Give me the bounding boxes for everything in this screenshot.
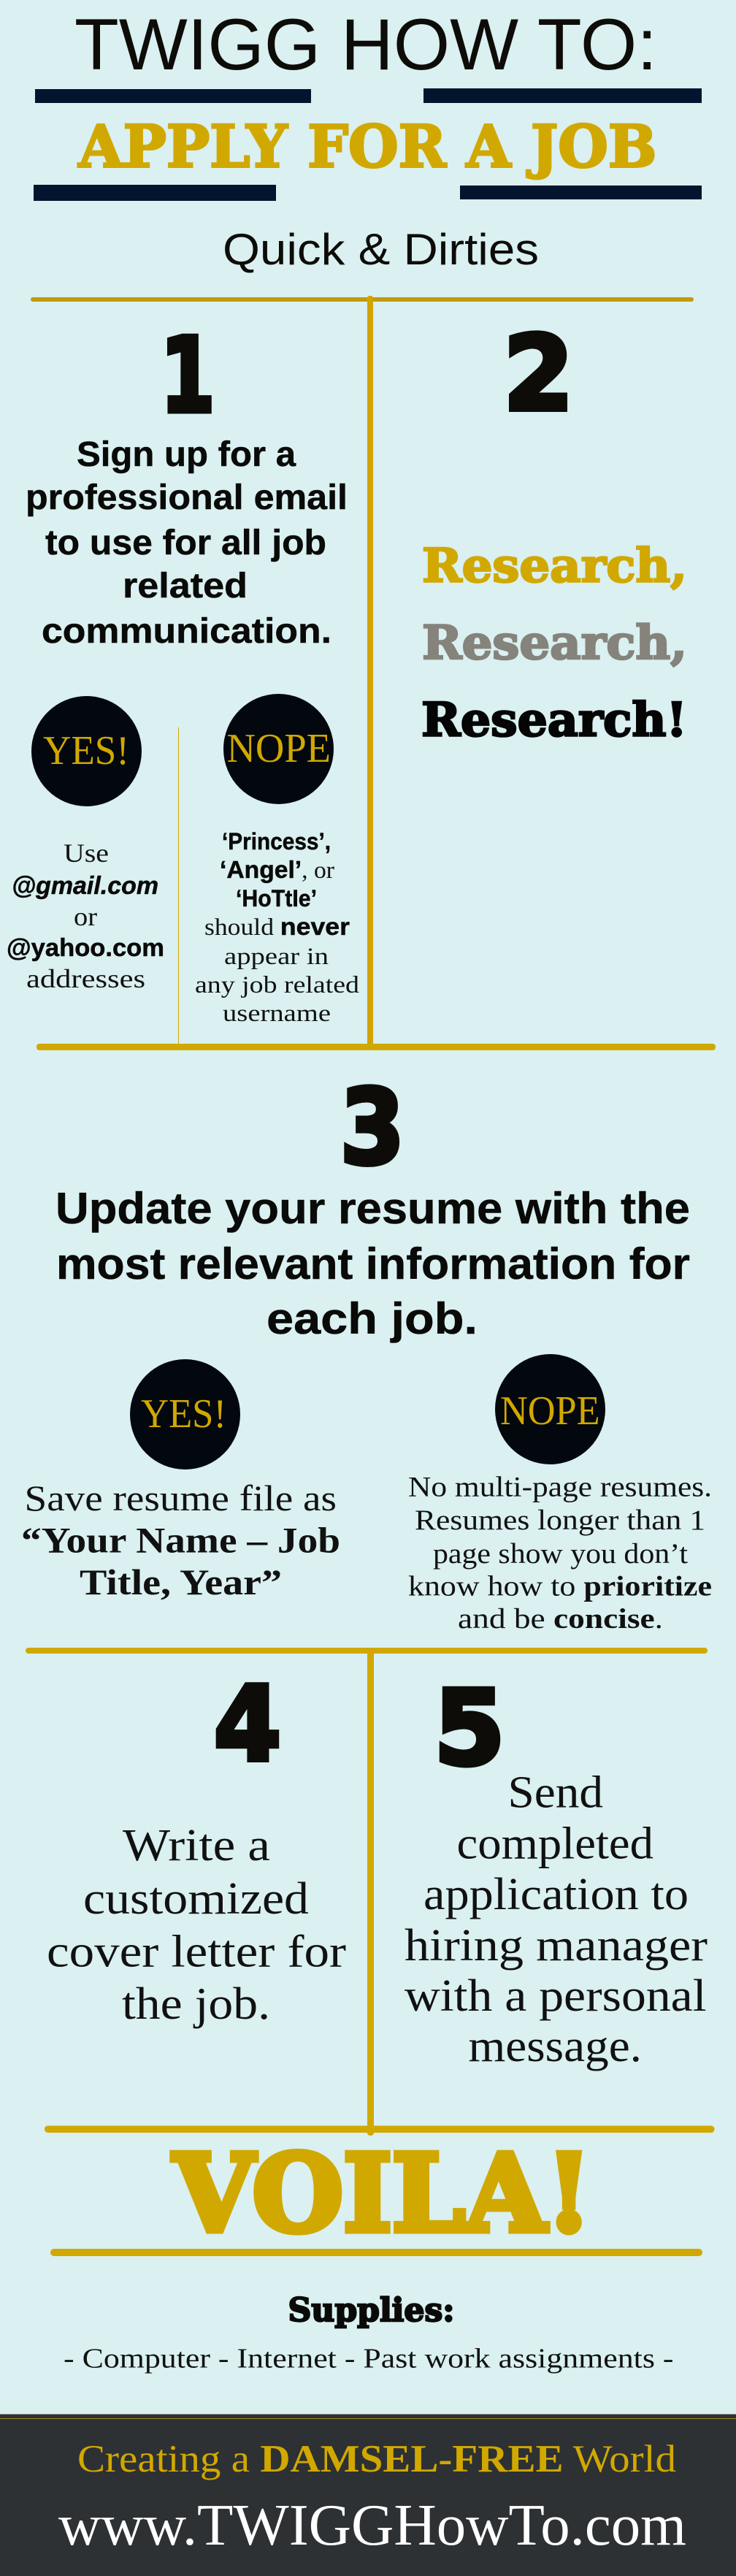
yes advice: @gmail.com xyxy=(12,872,158,900)
nope advice: any job related xyxy=(195,972,360,998)
supplies: - Computer - Internet - Past work assignments - xyxy=(64,2343,673,2374)
step 4 text: the job. xyxy=(122,1979,270,2029)
yes advice: Title, Year” xyxy=(80,1562,282,1602)
step 3 heading: most relevant information for xyxy=(56,1239,690,1288)
yes badge xyxy=(130,1359,240,1469)
title: TWIGG HOW TO: xyxy=(74,4,657,85)
yes badge: YES! xyxy=(43,728,129,773)
step 5 text: Send xyxy=(508,1767,603,1817)
research text xyxy=(421,539,687,748)
research text: Research, xyxy=(422,616,687,670)
step 1 text xyxy=(26,435,348,651)
panel: step 1 xyxy=(7,316,360,1027)
yes advice: @yahoo.com xyxy=(7,934,164,962)
nope badge: NOPE xyxy=(500,1388,600,1434)
nope advice: page show you don’t xyxy=(433,1538,688,1570)
step 5 text: with a personal xyxy=(405,1971,707,2021)
research text: Research! xyxy=(421,692,687,748)
panel dividers xyxy=(31,296,716,1050)
research text: Research, xyxy=(422,539,687,593)
nope advice: ‘HoTtIe’ xyxy=(236,885,317,911)
step 3 heading xyxy=(55,1184,690,1343)
step 4 text: cover letter for xyxy=(47,1927,346,1976)
tagline: Creating a DAMSEL-FREE World xyxy=(77,2438,676,2480)
nope advice: Resumes longer than 1 xyxy=(415,1505,705,1536)
number 3: 3 xyxy=(340,1068,405,1188)
yes advice xyxy=(21,1478,340,1602)
step 3 heading: each job. xyxy=(267,1294,478,1343)
nope badge xyxy=(223,694,334,804)
step 3 heading: Update your resume with the xyxy=(55,1184,690,1233)
step 4 text: customized xyxy=(83,1874,309,1924)
supplies: Supplies: xyxy=(288,2292,454,2329)
yes advice: “Your Name – Job xyxy=(21,1519,340,1560)
panel: step 4 xyxy=(47,1665,346,2029)
step 1 text: professional email xyxy=(26,478,348,517)
number 4: 4 xyxy=(214,1665,281,1785)
nope advice: and be concise . xyxy=(458,1603,663,1635)
step 4 text: Write a xyxy=(123,1821,270,1870)
nope advice: know how to prioritize xyxy=(408,1570,712,1602)
yes badge: YES! xyxy=(141,1391,226,1437)
voila banner: VOILA! xyxy=(173,2132,591,2256)
panel: step 2 xyxy=(421,314,687,748)
nope advice: should never xyxy=(204,913,350,941)
step 1 text: communication. xyxy=(42,612,331,651)
panel: step 3 xyxy=(21,1068,712,1635)
heading band: apply for a job xyxy=(34,88,702,201)
nope badge xyxy=(495,1354,605,1464)
step 1 text: Sign up for a xyxy=(77,435,296,474)
subtitle: Quick & Dirties xyxy=(223,225,539,274)
nope advice: ‘Princess’, xyxy=(222,828,331,855)
panel: step 5 xyxy=(405,1669,708,2071)
lower dividers xyxy=(26,1648,714,2136)
nope advice: ‘Angel’, or xyxy=(220,856,334,884)
voila banner xyxy=(50,2132,702,2256)
step 5 text: completed xyxy=(457,1819,653,1868)
step 5 text: application to xyxy=(423,1870,689,1919)
nope advice: username xyxy=(223,1001,331,1027)
nope advice xyxy=(408,1471,712,1635)
yes advice: Use xyxy=(64,838,109,868)
heading band: apply for a job: APPLY FOR A JOB xyxy=(78,112,657,181)
step 1 text: to use for all job xyxy=(45,524,326,562)
step 5 text: hiring manager xyxy=(405,1921,708,1971)
nope badge: NOPE xyxy=(226,726,331,771)
step 4 text xyxy=(47,1821,346,2029)
yes badge xyxy=(31,696,142,806)
yes advice: Save resume file as xyxy=(25,1478,337,1518)
number 5: 5 xyxy=(434,1669,505,1789)
number 1: 1 xyxy=(161,316,215,436)
nope advice: appear in xyxy=(224,944,329,970)
website: www.TWIGGHowTo.com xyxy=(58,2492,686,2558)
footer xyxy=(0,2415,736,2576)
yes advice: addresses xyxy=(26,964,145,993)
number 2: 2 xyxy=(504,314,574,434)
nope advice xyxy=(195,828,360,1027)
nope advice: No multi-page resumes. xyxy=(408,1471,712,1503)
supplies xyxy=(64,2292,673,2374)
step 5 text xyxy=(405,1767,708,2071)
step 1 text: related xyxy=(123,567,248,605)
yes advice xyxy=(7,838,164,993)
yes advice: or xyxy=(74,902,97,931)
step 5 text: message. xyxy=(469,2022,642,2071)
